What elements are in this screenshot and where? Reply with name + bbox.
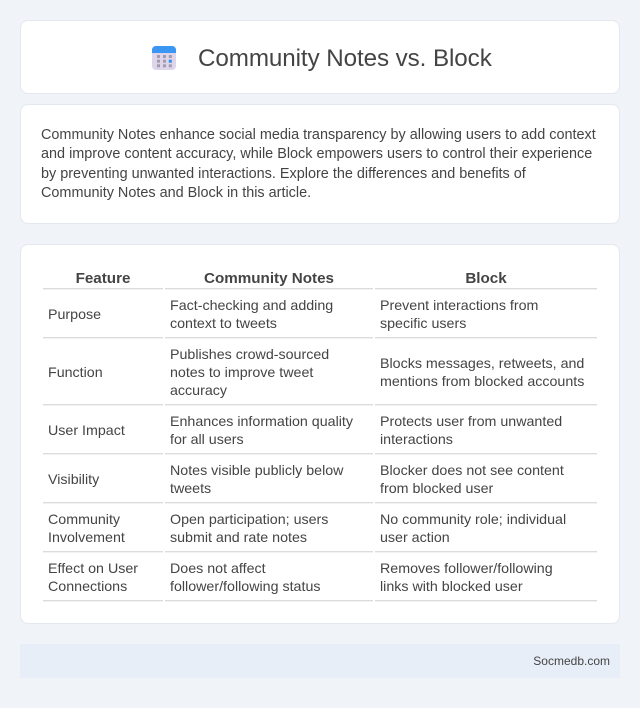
title: Community Notes vs. Block [198,45,492,72]
intro text: Community Notes enhance social media transparency by allowing users to add context [41,127,596,143]
footer text: Socmedb.com [533,654,610,668]
intro text: Community Notes and Block in this article. [41,185,311,201]
cell [380,561,553,595]
row: Community Involvement [48,512,125,546]
cell: Removes follower/following [380,561,553,577]
cell: Publishes crowd-sourced [170,347,329,363]
cell: notes to improve tweet [170,365,313,381]
row: Visibility: Visibility [48,472,99,488]
cell: tweets [170,481,211,497]
cell: Prevent interactions from [380,298,538,314]
header: Block: Block [465,270,507,287]
row: Purpose: Purpose [48,307,101,323]
icon: calendar [152,46,176,70]
cell: accuracy [170,383,227,399]
cell: Open participation; users [170,512,328,528]
row: Function: Function [48,365,103,381]
cell [170,561,320,595]
cell: Notes visible publicly below [170,463,343,479]
cell [170,512,328,546]
header: Community Notes: Community Notes [204,270,334,287]
row: User Impact: User Impact [48,423,125,439]
cell: Does not affect [170,561,266,577]
cell: context to tweets [170,316,277,332]
cell: interactions [380,432,453,448]
row: Community Involvement: Community [48,512,120,528]
footer bar [20,644,620,678]
cell [380,512,566,546]
cell [170,463,344,497]
cell: Blocker does not see content [380,463,564,479]
comparison table card [20,244,620,624]
cell: for all users [170,432,244,448]
cell [380,463,564,497]
cell: Fact-checking and adding [170,298,333,314]
cell: follower/following status [170,579,320,595]
cell: No community role; individual [380,512,566,528]
cell: links with blocked user [380,579,523,595]
cell [380,298,538,332]
cell [170,347,329,399]
cell [170,298,333,332]
row: Effect on User Connections: Connections [48,579,127,595]
intro card [20,104,620,224]
cell: user action [380,530,450,546]
cell: Protects user from unwanted [380,414,562,430]
cell [170,414,353,448]
intro text: and improve content accuracy, while Block empowers users to control their experience [41,146,592,162]
cell: specific users [380,316,466,332]
intro text: by preventing unwanted interactions. Explore the differences and benefits of [41,166,526,182]
row: Effect on User Connections: Effect on User [48,561,138,577]
row: Community Involvement: Involvement [48,530,125,546]
cell: mentions from blocked accounts [380,374,584,390]
cell [380,414,562,448]
intro text [41,127,596,201]
cell: submit and rate notes [170,530,307,546]
cell: from blocked user [380,481,493,497]
cell [380,356,584,390]
header: Feature: Feature [76,270,130,287]
title card [20,20,620,94]
cell: Enhances information quality [170,414,353,430]
cell: Blocks messages, retweets, and [380,356,584,372]
row: Effect on User Connections [48,561,138,595]
